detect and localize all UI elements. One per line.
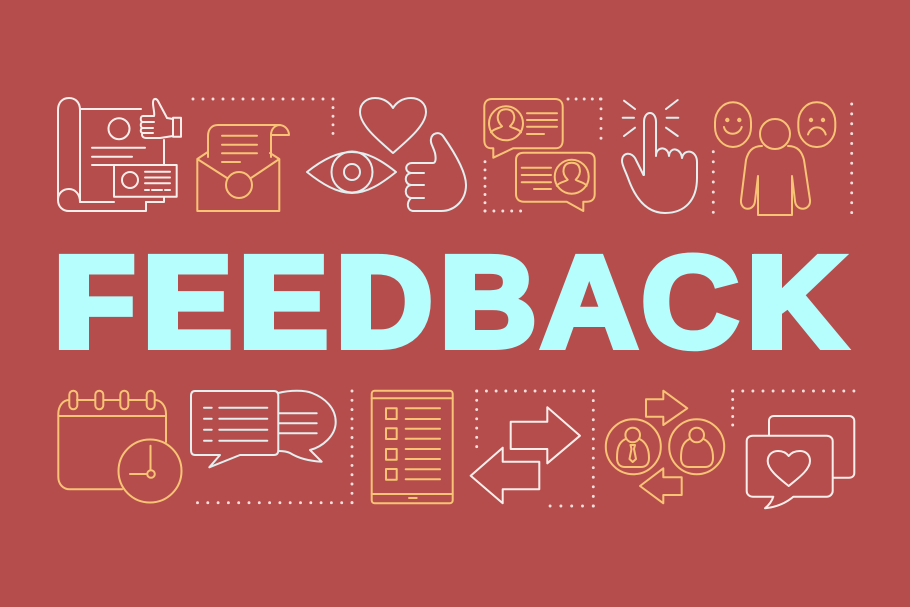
dotted frame: arrows top (477, 390, 593, 392)
icon: person with smiley and sad faces (715, 102, 835, 215)
dotted frame: chat right side (600, 99, 602, 139)
icon: profile chat bubbles (484, 99, 595, 211)
dotted frame: person left (712, 152, 715, 213)
icon: document with thumbs up (58, 98, 181, 211)
dotted frame: chat bottom (485, 210, 521, 212)
icon: pointing hand with rays (622, 100, 697, 213)
icon: eye (307, 152, 396, 193)
title: FEEDBACK (53, 229, 846, 375)
icon: exchange arrows (471, 407, 580, 503)
dotted frame: bubbles bottom (188, 501, 352, 504)
icon: calendar with clock (58, 391, 181, 502)
dotted frame: top left (193, 98, 333, 100)
icon: people exchange (606, 391, 724, 503)
icon: two speech bubbles (191, 391, 336, 467)
dotted frame: person right (850, 104, 853, 213)
dotted frame: bubbles right (351, 391, 353, 503)
icon: envelope with letter (197, 125, 289, 211)
dotted frame: hearts top (733, 390, 854, 392)
dotted frame: chat top right (568, 98, 601, 100)
dotted frame: hearts left (731, 391, 734, 426)
icon: heart (360, 98, 426, 153)
dotted frame: arrows left (475, 391, 478, 447)
dotted frame: chat left side (484, 162, 486, 211)
dotted frame: arrows right (592, 391, 595, 506)
icon: tablet checklist (372, 391, 453, 503)
dotted frame: arrows bottom (550, 505, 593, 507)
icon: heart message bubbles (747, 416, 854, 508)
icon: thumbs up (406, 133, 466, 211)
dotted frame: top left side (332, 99, 334, 134)
